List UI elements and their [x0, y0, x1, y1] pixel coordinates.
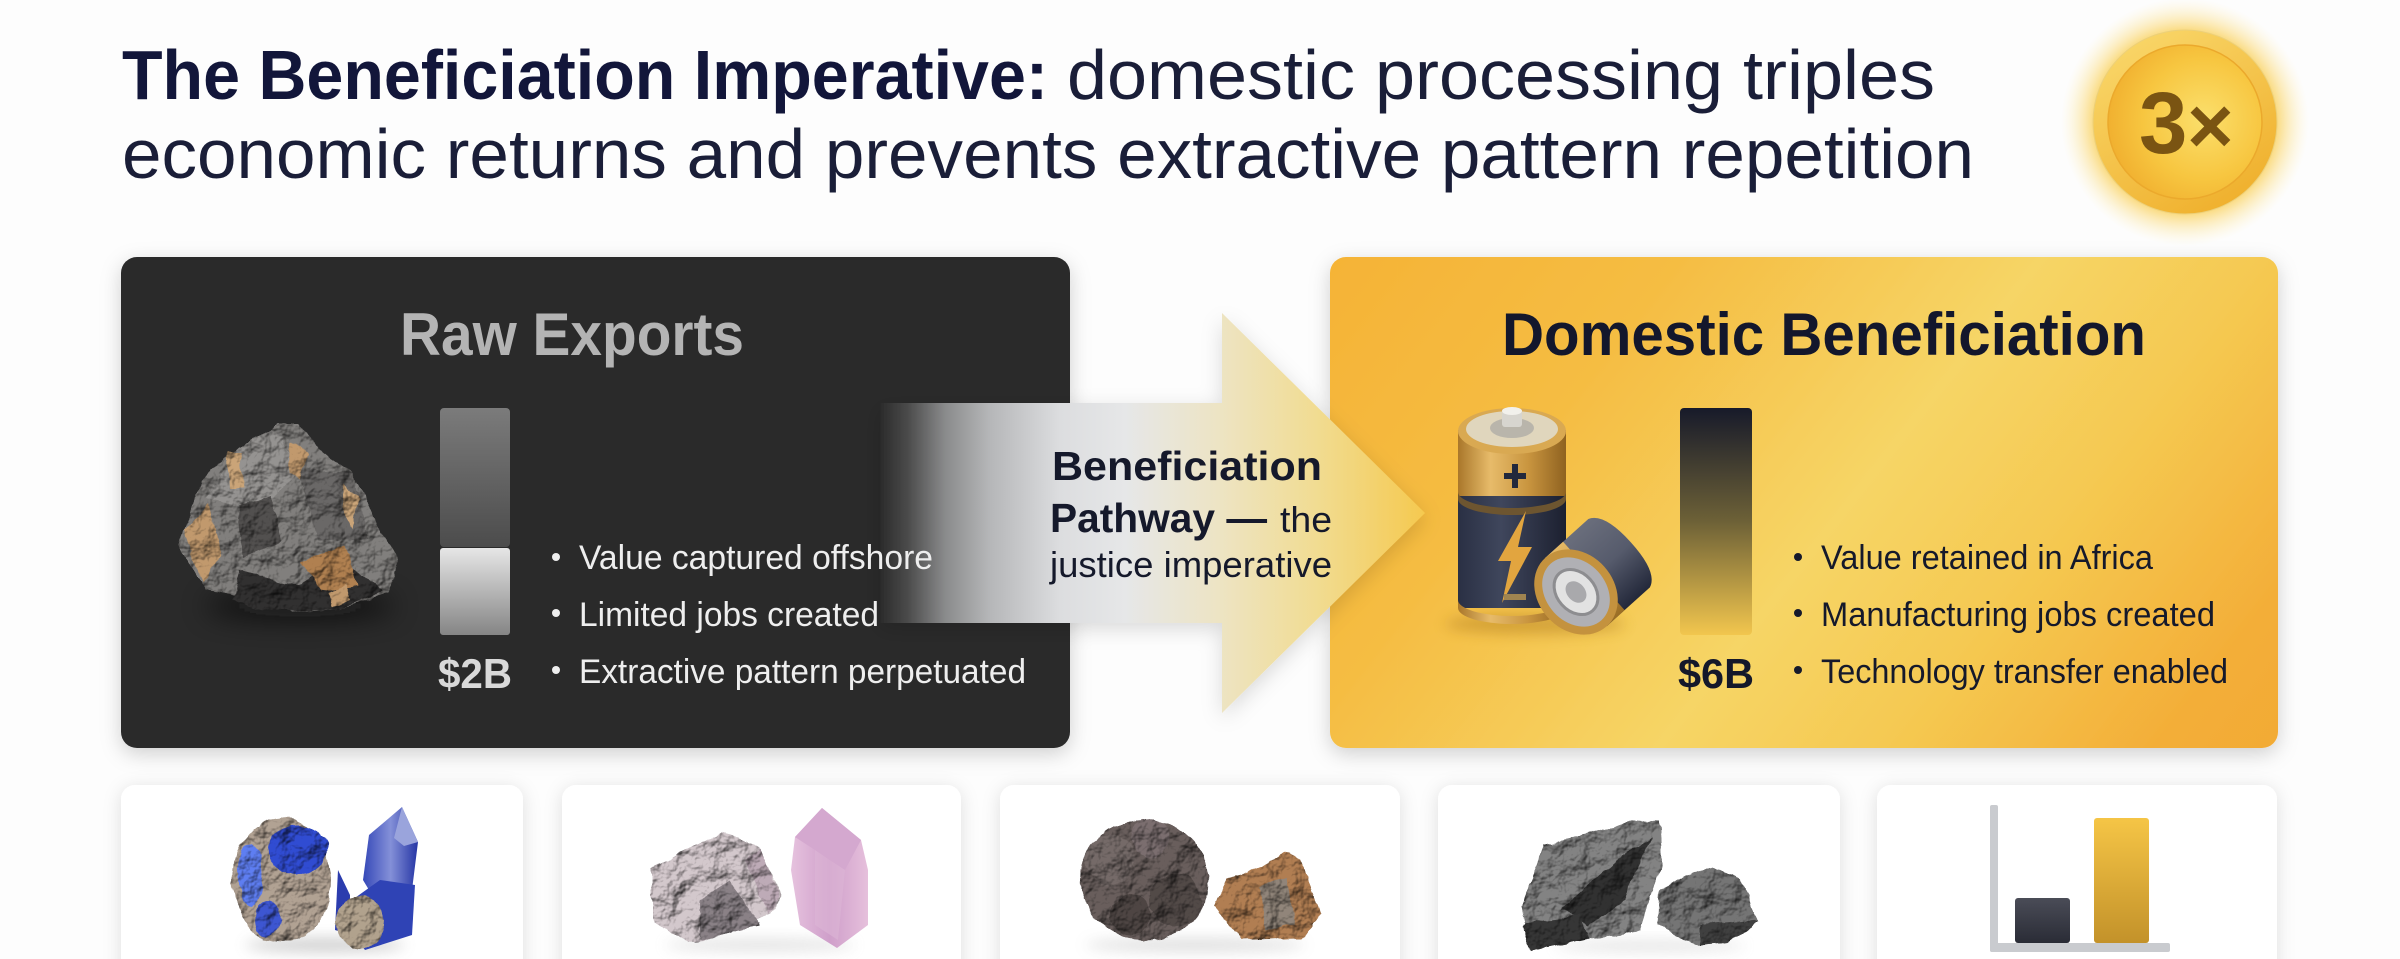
list: raw export effects: Limited jobs created: [579, 596, 879, 634]
chart: beneficiated value bar: [1680, 408, 1752, 635]
card: graphite mineral: [1438, 785, 1840, 959]
arrow label: Pathway —: [1050, 495, 1267, 541]
list: raw export effects: [552, 539, 1026, 691]
icon: graphite rocks: [1522, 820, 1760, 951]
icon: 3x gold coin: 3: [2139, 75, 2187, 172]
panel: domestic beneficiation: [1330, 257, 2278, 748]
card: cobalt mineral: [121, 785, 523, 959]
panel: raw exports background: [121, 257, 1070, 748]
arrow label: [1049, 443, 1332, 585]
card: manganese mineral: [1000, 785, 1400, 959]
heading: raw exports: Raw Exports: [400, 301, 744, 368]
list: beneficiation effects: Value retained in Africa: [1821, 539, 2153, 577]
page title: economic returns and prevents extractive pattern repetition: [122, 115, 1974, 193]
icon: 3x gold coin: [2061, 0, 2309, 246]
value: $6B: $6B: [1678, 650, 1754, 697]
list: beneficiation effects: Manufacturing jobs created: [1821, 596, 2215, 634]
arrow label: the: [1280, 499, 1332, 540]
page title: [122, 36, 1974, 193]
icon: raw ore rock: [180, 424, 398, 618]
page title: domestic processing triples: [1067, 36, 1935, 114]
list: beneficiation effects: [1794, 539, 2228, 691]
icon: batteries: [1445, 407, 1662, 652]
icon: dark nodule and brown rock: [1081, 818, 1322, 951]
card: value comparison: [1877, 785, 2277, 959]
page title: The Beneficiation Imperative:: [122, 36, 1048, 114]
chart: raw value bar: [440, 408, 510, 635]
chart: mini bar comparison: [1990, 805, 2170, 952]
arrow label: justice imperative: [1049, 544, 1332, 585]
heading: domestic beneficiation: Domestic Beneficiation: [1502, 301, 2146, 368]
value: $2B: $2B: [438, 650, 512, 697]
arrow: beneficiation pathway: [880, 313, 1425, 713]
list: raw export effects: Extractive pattern perpetuated: [579, 653, 1026, 691]
card: lithium mineral: [562, 785, 961, 959]
icon: spodumene rock and pink crystal: [652, 808, 868, 951]
arrow label: Beneficiation: [1052, 443, 1322, 489]
icon: blue crystal cluster: [232, 807, 418, 952]
list: beneficiation effects: Technology transfer enabled: [1821, 653, 2228, 691]
icon: 3x gold coin: ×: [2187, 81, 2234, 170]
list: raw export effects: Value captured offshore: [579, 539, 933, 577]
